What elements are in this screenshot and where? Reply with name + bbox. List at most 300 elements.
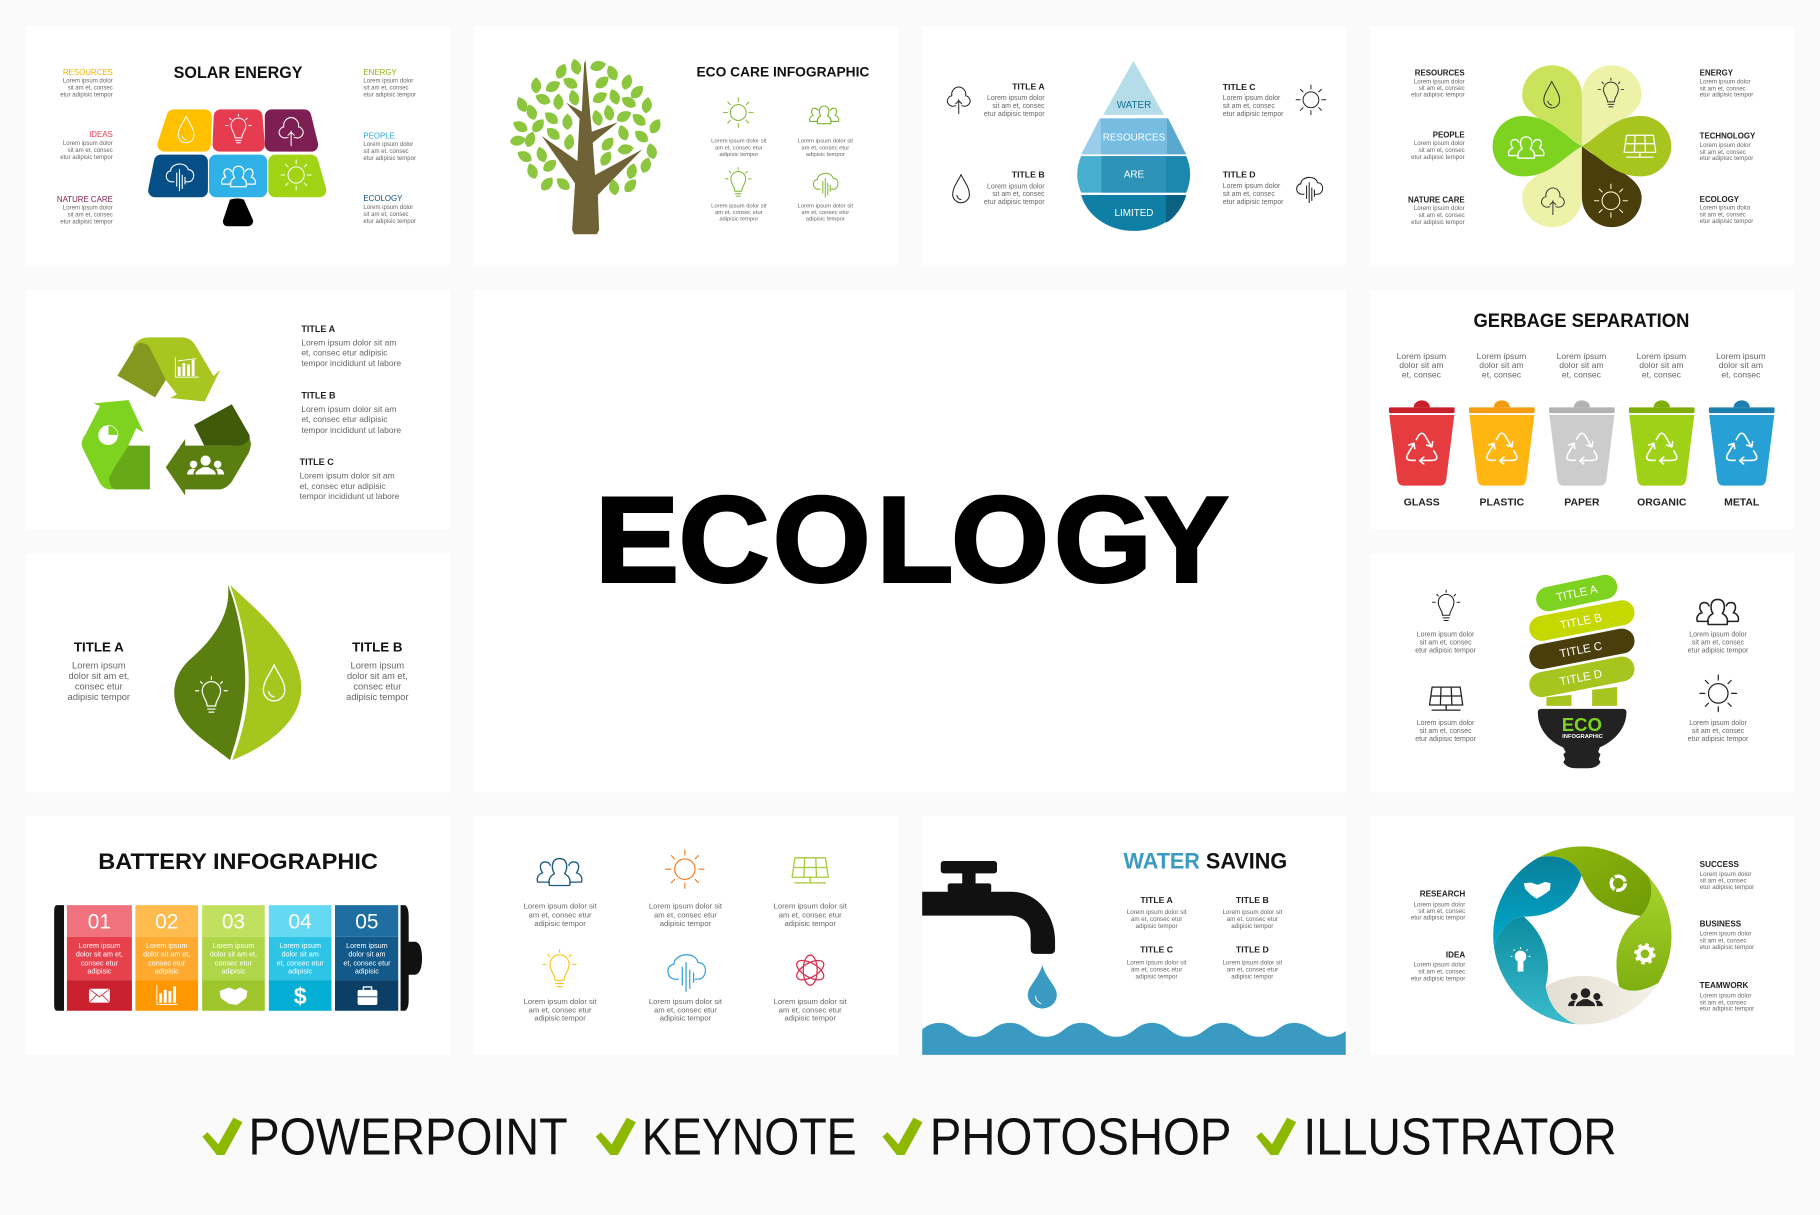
text: icon captions: adipisic tempor bbox=[660, 919, 712, 928]
drop diagram: LIMITED bbox=[1115, 208, 1153, 219]
text: icon captions: am et, consec etur bbox=[529, 910, 592, 919]
text: title b bbox=[984, 170, 1045, 206]
icon: bulb bbox=[543, 950, 576, 987]
text: title a: et, consec etur adipisic bbox=[301, 348, 388, 358]
text: ideas bbox=[60, 130, 113, 161]
text: research: sit am et, consec bbox=[1418, 908, 1465, 915]
faucet bbox=[922, 861, 1055, 954]
battery cell 02: consec etur bbox=[148, 958, 186, 967]
text: research bbox=[1411, 889, 1465, 922]
text: teamwork: TEAMWORK bbox=[1700, 981, 1748, 990]
text: icon captions: adipisic tempor bbox=[785, 1014, 836, 1023]
text: title c: TITLE C bbox=[1140, 945, 1174, 955]
text: resources bbox=[1411, 68, 1465, 98]
text: ecology bbox=[363, 194, 416, 225]
battery cell 05: 05 bbox=[355, 910, 379, 933]
text: success: Lorem ipsum dolor bbox=[1700, 871, 1751, 878]
battery cell 03 bbox=[202, 905, 265, 1011]
icons: eco care bbox=[723, 98, 839, 197]
format list bbox=[202, 1107, 1617, 1165]
text: icon captions: am et, consec etur bbox=[779, 910, 842, 919]
text: bulb captions: etur adipisic tempor bbox=[1415, 648, 1477, 655]
text: title b bbox=[301, 390, 401, 435]
text: energy bbox=[363, 68, 416, 98]
text: business: Lorem ipsum dolor bbox=[1700, 931, 1751, 938]
text: title a: TITLE A bbox=[1012, 81, 1045, 91]
text: idea: IDEA bbox=[1446, 950, 1465, 959]
panel: recycling bbox=[26, 290, 450, 529]
text: bulb captions: Lorem ipsum dolor bbox=[1417, 720, 1475, 727]
text: eco care captions: Lorem ipsum dolor sit bbox=[798, 204, 853, 210]
battery cell 04: Lorem ipsum bbox=[279, 941, 321, 950]
text: title a bbox=[301, 324, 401, 368]
battery cell 05 bbox=[335, 905, 398, 1011]
text: eco care captions: am et, consec etur bbox=[801, 210, 849, 216]
text: title a: etur adipisic tempor bbox=[984, 111, 1045, 118]
text: icon captions bbox=[524, 902, 848, 1023]
text: title b: TITLE B bbox=[301, 390, 336, 400]
bin: plastic bbox=[1469, 400, 1535, 508]
battery caps bbox=[54, 905, 422, 1011]
text: title d bbox=[1222, 945, 1282, 980]
text: title b: Lorem ipsum bbox=[351, 660, 404, 670]
text: research: etur adipisic tempor bbox=[1411, 915, 1465, 922]
icon: sun bbox=[666, 850, 704, 888]
text: bin captions: et, consec bbox=[1402, 370, 1442, 380]
text: ecology: sit am et, consec bbox=[1700, 211, 1746, 218]
battery cell 03: Lorem ipsum bbox=[213, 941, 254, 950]
bulb diagram bbox=[1527, 573, 1637, 768]
text: bin captions: et, consec bbox=[1721, 370, 1761, 380]
text: energy: etur adipisic tempor bbox=[1700, 91, 1753, 98]
text: bulb captions: sit am et, consec bbox=[1419, 640, 1472, 647]
text: bin captions: et, consec bbox=[1562, 370, 1602, 380]
format: photoshop: PHOTOSHOP bbox=[930, 1107, 1231, 1165]
text: title a: Lorem ipsum bbox=[72, 660, 126, 670]
drop diagram: RESOURCES bbox=[1103, 132, 1166, 143]
text: bin captions: et, consec bbox=[1482, 370, 1522, 380]
text: bin captions: dolor sit am bbox=[1719, 360, 1763, 370]
check: photoshop bbox=[882, 1118, 923, 1155]
text: icon captions: am et, consec etur bbox=[529, 1005, 592, 1014]
text: idea: Lorem ipsum dolor bbox=[1414, 962, 1465, 969]
battery cell 01: dolor sit am et, bbox=[76, 950, 123, 959]
heading: solar energy: SOLAR ENERGY bbox=[174, 63, 302, 82]
text: bin captions: Lorem ipsum bbox=[1716, 351, 1766, 361]
text: ecology: sit am et, consec bbox=[363, 212, 409, 218]
text: energy: ENERGY bbox=[1700, 68, 1734, 77]
text: success bbox=[1700, 860, 1754, 891]
battery cell 04: adipisic bbox=[288, 967, 313, 976]
bulb diagram: TITLE C bbox=[1559, 640, 1603, 661]
text: eco care captions: adipisic tempor bbox=[806, 216, 845, 222]
text: title b: TITLE B bbox=[1012, 170, 1045, 180]
text: title d: etur adipisic tempor bbox=[1223, 199, 1284, 206]
text: business: etur adipisic tempor bbox=[1700, 944, 1754, 951]
text: icon captions: Lorem ipsum dolor sit bbox=[774, 997, 848, 1006]
battery cell 05: et, consec etur bbox=[343, 958, 391, 967]
bin: organic bbox=[1629, 400, 1695, 508]
text: nature care: sit am et, consec bbox=[1419, 212, 1465, 219]
text: technology: Lorem ipsum dolor bbox=[1700, 142, 1751, 149]
bin: metal: METAL bbox=[1724, 497, 1760, 508]
text: bin captions bbox=[1397, 351, 1766, 380]
text: title b: etur adipisic tempor bbox=[984, 199, 1045, 206]
text: title c: am et, consec etur bbox=[1131, 966, 1182, 973]
text: teamwork: sit am et, consec bbox=[1700, 999, 1747, 1006]
text: eco care captions bbox=[711, 139, 853, 222]
icon: atom bbox=[794, 955, 827, 985]
text: title b: Lorem ipsum dolor bbox=[987, 184, 1045, 191]
text: nature care: NATURE CARE bbox=[57, 195, 113, 204]
text: ideas: IDEAS bbox=[89, 130, 113, 139]
text: energy: sit am et, consec bbox=[363, 85, 409, 91]
text: bin captions: Lorem ipsum bbox=[1637, 351, 1686, 361]
text: nature care bbox=[1408, 196, 1465, 226]
panel: clover bbox=[1370, 27, 1794, 266]
icon: people bbox=[537, 859, 582, 885]
text: title a: Lorem ipsum dolor bbox=[987, 95, 1045, 102]
text: title b: sit am et, consec bbox=[992, 191, 1045, 198]
text: title d: TITLE D bbox=[1223, 170, 1256, 180]
text: energy: Lorem ipsum dolor bbox=[1700, 79, 1751, 86]
text: ecology: etur adipisic tempor bbox=[363, 219, 416, 225]
bin: paper bbox=[1549, 400, 1615, 508]
text: title a: Lorem ipsum dolor sit bbox=[1127, 909, 1187, 916]
text: resources: Lorem ipsum dolor bbox=[1414, 79, 1465, 86]
text: title c: Lorem ipsum dolor sit am bbox=[300, 471, 395, 481]
text: eco care captions: am et, consec etur bbox=[715, 210, 763, 216]
text: ideas: Lorem ipsum dolor bbox=[63, 141, 113, 147]
battery cell 04: $ bbox=[294, 983, 307, 1009]
text: bin captions: dolor sit am bbox=[1399, 360, 1444, 370]
text: energy: Lorem ipsum dolor bbox=[363, 78, 413, 84]
battery cell 04: 04 bbox=[289, 910, 312, 933]
text: title c: TITLE C bbox=[1223, 82, 1256, 92]
heading: water saving: WATER SAVING bbox=[1124, 849, 1287, 874]
text: technology: sit am et, consec bbox=[1700, 149, 1746, 156]
text: title b: TITLE B bbox=[352, 640, 403, 655]
recycling arrows bbox=[82, 337, 251, 496]
battery cell 02: dolor sit am et, bbox=[143, 950, 190, 959]
icon: cloud bbox=[668, 955, 705, 991]
text: icon captions: adipisic tempor bbox=[534, 1014, 586, 1023]
text: title a bbox=[984, 81, 1045, 118]
text: energy: etur adipisic tempor bbox=[363, 92, 416, 98]
text: people: PEOPLE bbox=[363, 132, 395, 141]
text: people: Lorem ipsum dolor bbox=[1414, 140, 1465, 147]
battery cell 03: consec etur bbox=[215, 958, 253, 967]
text: nature care: NATURE CARE bbox=[1408, 196, 1465, 205]
text: technology: TECHNOLOGY bbox=[1700, 132, 1756, 141]
text: nature care: sit am et, consec bbox=[68, 212, 113, 218]
text: resources bbox=[60, 68, 113, 98]
text: people: etur adipisic tempor bbox=[1411, 154, 1465, 161]
tree bbox=[509, 58, 664, 234]
text: icon captions: Lorem ipsum dolor sit bbox=[774, 902, 848, 911]
icons: water drop panel bbox=[947, 85, 1326, 203]
text: people bbox=[363, 132, 416, 162]
text: people: sit am et, consec bbox=[363, 149, 409, 155]
text: title a: TITLE A bbox=[301, 324, 336, 334]
circle diagram bbox=[1493, 846, 1672, 1024]
text: bulb captions: etur adipisic tempor bbox=[1688, 648, 1749, 655]
text: people: Lorem ipsum dolor bbox=[363, 142, 413, 148]
text: people: PEOPLE bbox=[1433, 131, 1465, 140]
bulb diagram: TITLE A bbox=[1555, 583, 1599, 604]
text: energy: ENERGY bbox=[363, 68, 397, 77]
battery cell 04: et, consec etur bbox=[277, 958, 324, 967]
text: idea: etur adipisic tempor bbox=[1411, 976, 1465, 983]
text: bin captions: et, consec bbox=[1642, 370, 1682, 380]
text: title a: tempor incididunt ut labore bbox=[301, 358, 401, 368]
text: title a bbox=[68, 640, 130, 702]
text: ecology: ECOLOGY bbox=[1700, 195, 1740, 204]
text: nature care bbox=[57, 195, 113, 225]
text: title a: consec etur bbox=[75, 681, 123, 691]
format: powerpoint: POWERPOINT bbox=[249, 1107, 568, 1165]
text: bulb captions: sit am et, consec bbox=[1419, 728, 1472, 735]
text: title b bbox=[1222, 895, 1282, 930]
text: bulb captions: etur adipisic tempor bbox=[1415, 736, 1477, 743]
text: title a: TITLE A bbox=[1140, 895, 1174, 905]
text: title d: TITLE D bbox=[1236, 945, 1269, 955]
text: title a: adipisic tempor bbox=[1136, 923, 1178, 930]
text: title b: adipisic tempor bbox=[1231, 923, 1273, 930]
heading: battery infographic: BATTERY INFOGRAPHIC bbox=[98, 849, 378, 874]
leaf diagram bbox=[174, 585, 301, 760]
text: title b bbox=[346, 640, 409, 702]
text: success: SUCCESS bbox=[1700, 860, 1739, 869]
drop diagram bbox=[1077, 61, 1190, 231]
battery cell 02: Lorem ipsum bbox=[146, 941, 188, 950]
text: idea bbox=[1411, 950, 1465, 983]
panel: battery infographic bbox=[26, 816, 450, 1055]
text: title a: am et, consec etur bbox=[1131, 916, 1182, 923]
text: icon captions: am et, consec etur bbox=[779, 1005, 842, 1014]
battery cell 04 bbox=[269, 905, 332, 1011]
text: ecology: Lorem ipsum dolor bbox=[363, 205, 413, 211]
text: title c: Lorem ipsum dolor sit bbox=[1127, 959, 1187, 966]
text: eco care captions: Lorem ipsum dolor sit bbox=[798, 139, 853, 145]
text: ecology: ECOLOGY bbox=[363, 194, 403, 203]
text: bulb captions bbox=[1415, 632, 1749, 743]
text: teamwork: Lorem ipsum dolor bbox=[1700, 992, 1751, 999]
drop diagram: WATER bbox=[1117, 100, 1151, 111]
drop diagram: ARE bbox=[1124, 170, 1145, 181]
text: title d: Lorem ipsum dolor bbox=[1223, 183, 1281, 190]
text: title a: TITLE A bbox=[74, 640, 124, 655]
text: title c bbox=[1223, 82, 1284, 118]
text: title c bbox=[1127, 945, 1187, 980]
text: icon captions: Lorem ipsum dolor sit bbox=[649, 902, 723, 911]
text: technology bbox=[1700, 132, 1756, 162]
text: eco care captions: Lorem ipsum dolor sit bbox=[711, 204, 767, 210]
text: nature care: Lorem ipsum dolor bbox=[63, 205, 113, 211]
battery cell 02 bbox=[135, 905, 198, 1011]
text: resources: RESOURCES bbox=[1415, 68, 1465, 77]
battery cell 03: dolor sit am et, bbox=[210, 950, 257, 959]
battery cell 05: dolor sit am bbox=[348, 950, 385, 959]
clover diagram bbox=[1493, 65, 1671, 227]
text: resources: RESOURCES bbox=[63, 68, 113, 77]
text: icon captions: adipisic tempor bbox=[660, 1014, 712, 1023]
text: bulb captions: sit am et, consec bbox=[1692, 728, 1745, 735]
text: title c: sit am et, consec bbox=[1223, 103, 1275, 110]
text: icon captions: Lorem ipsum dolor sit bbox=[524, 902, 598, 911]
text: eco care captions: adipisic tempor bbox=[719, 216, 758, 222]
text: bin captions: dolor sit am bbox=[1559, 360, 1604, 370]
text: ecology bbox=[1700, 195, 1753, 225]
text: ideas: sit am et, consec bbox=[68, 148, 113, 154]
solar panel diagram bbox=[155, 114, 319, 226]
panel: water saving bbox=[922, 816, 1346, 1055]
text: resources: sit am et, consec bbox=[1419, 85, 1465, 92]
bulb diagram: ECO bbox=[1562, 714, 1602, 735]
text: bin captions: Lorem ipsum bbox=[1397, 351, 1446, 361]
text: research: RESEARCH bbox=[1420, 889, 1465, 898]
battery cell 01: Lorem ipsum bbox=[79, 941, 120, 950]
bin: glass: GLASS bbox=[1404, 497, 1440, 508]
text: title c: TITLE C bbox=[300, 457, 334, 467]
battery cell 01: 01 bbox=[88, 910, 111, 933]
battery cell 03: 03 bbox=[222, 910, 245, 933]
text: bin captions: Lorem ipsum bbox=[1557, 351, 1606, 361]
bulb diagram: TITLE D bbox=[1558, 667, 1603, 688]
text: eco care captions: am et, consec etur bbox=[801, 146, 849, 152]
text: title b: Lorem ipsum dolor sit bbox=[1222, 909, 1282, 916]
text: nature care: etur adipisic tempor bbox=[1411, 219, 1465, 226]
text: bulb captions: etur adipisic tempor bbox=[1688, 736, 1749, 743]
text: bulb captions: sit am et, consec bbox=[1692, 640, 1745, 647]
check: illustrator bbox=[1256, 1118, 1296, 1155]
battery cell 01: consec etur bbox=[81, 958, 119, 967]
battery cell 01 bbox=[67, 905, 132, 1011]
text: title a: dolor sit am et, bbox=[68, 671, 129, 681]
text: title a: Lorem ipsum dolor sit am bbox=[301, 338, 396, 348]
icons: bulb panel bbox=[1430, 590, 1738, 712]
text: eco care captions: am et, consec etur bbox=[715, 146, 763, 152]
panel: leaf bbox=[26, 554, 450, 793]
text: resources: etur adipisic tempor bbox=[1411, 91, 1465, 98]
water drop bbox=[1028, 965, 1057, 1008]
text: research: Lorem ipsum dolor bbox=[1414, 901, 1465, 908]
text: title d: am et, consec etur bbox=[1227, 966, 1278, 973]
text: icon captions: am et, consec etur bbox=[654, 910, 717, 919]
heading: eco care infographic: ECO CARE INFOGRAPHIC bbox=[696, 64, 869, 80]
text: idea: sit am et, consec bbox=[1418, 969, 1465, 976]
text: title b: et, consec etur adipisic bbox=[301, 414, 388, 424]
text: title d: sit am et, consec bbox=[1223, 191, 1275, 198]
text: bulb captions: Lorem ipsum dolor bbox=[1689, 720, 1747, 727]
text: ideas: etur adipisic tempor bbox=[60, 155, 113, 161]
text: title b: consec etur bbox=[353, 681, 401, 691]
text: ecology: Lorem ipsum dolor bbox=[1700, 204, 1751, 211]
text: title c: adipisic tempor bbox=[1136, 973, 1178, 980]
text: title b: tempor incididunt ut labore bbox=[301, 425, 401, 435]
text: bin captions: dolor sit am bbox=[1639, 360, 1684, 370]
text: success: sit am et, consec bbox=[1700, 878, 1747, 885]
text: icon captions: am et, consec etur bbox=[654, 1005, 717, 1014]
text: people: sit am et, consec bbox=[1419, 147, 1465, 154]
check: keynote bbox=[596, 1118, 636, 1155]
text: nature care: Lorem ipsum dolor bbox=[1414, 205, 1465, 212]
battery cell 04: dolor sit am bbox=[282, 950, 319, 959]
battery cell 05: Lorem ipsum bbox=[346, 941, 388, 950]
text: business bbox=[1700, 920, 1754, 951]
battery cell 01: adipisic bbox=[87, 967, 112, 976]
panel: eco care infographic bbox=[474, 27, 898, 266]
text: icon captions: adipisic tempor bbox=[534, 919, 586, 928]
bin: plastic: PLASTIC bbox=[1480, 497, 1525, 508]
format: keynote: KEYNOTE bbox=[642, 1107, 857, 1165]
text: bulb captions: Lorem ipsum dolor bbox=[1689, 632, 1747, 639]
text: teamwork: etur adipisic tempor bbox=[1700, 1006, 1754, 1013]
text: eco care captions: Lorem ipsum dolor sit bbox=[711, 139, 767, 145]
battery cell 03: adipisic bbox=[221, 967, 246, 976]
battery cell 05: adipisic bbox=[355, 967, 379, 976]
text: resources: sit am et, consec bbox=[68, 85, 113, 91]
text: title a: sit am et, consec bbox=[992, 103, 1045, 110]
text: eco care captions: adipisic tempor bbox=[806, 152, 845, 158]
bin: organic: ORGANIC bbox=[1637, 497, 1687, 508]
text: technology: etur adipisic tempor bbox=[1700, 155, 1753, 162]
text: teamwork bbox=[1700, 981, 1754, 1013]
text: ecology: etur adipisic tempor bbox=[1700, 218, 1753, 225]
battery cell 02: 02 bbox=[155, 910, 178, 933]
panel: garbage separation bbox=[1370, 290, 1794, 529]
text: title a bbox=[1127, 895, 1187, 930]
bulb diagram: TITLE B bbox=[1559, 611, 1603, 632]
text: business: BUSINESS bbox=[1700, 920, 1742, 929]
text: eco care captions: adipisic tempor bbox=[719, 152, 758, 158]
heading: gerbage separation: GERBAGE SEPARATION bbox=[1474, 310, 1689, 332]
text: title b: TITLE B bbox=[1236, 895, 1269, 905]
text: bin captions: dolor sit am bbox=[1479, 360, 1524, 370]
text: business: sit am et, consec bbox=[1700, 937, 1747, 944]
text: title b: Lorem ipsum dolor sit am bbox=[301, 404, 396, 414]
text: people: etur adipisic tempor bbox=[363, 156, 416, 162]
panel: eco bulb bbox=[1370, 554, 1794, 793]
text: nature care: etur adipisic tempor bbox=[60, 219, 113, 225]
text: energy bbox=[1700, 68, 1753, 98]
text: icon captions: Lorem ipsum dolor sit bbox=[649, 997, 723, 1006]
text: icon captions: adipisic tempor bbox=[785, 919, 836, 928]
waves bbox=[922, 1023, 1346, 1055]
title panel: ecology bbox=[474, 290, 1346, 793]
panel: five-part circle bbox=[1370, 816, 1794, 1055]
text: title c: Lorem ipsum dolor bbox=[1223, 95, 1281, 102]
battery cell 02: adipisic bbox=[155, 967, 179, 976]
text: icon captions: Lorem ipsum dolor sit bbox=[524, 997, 598, 1006]
panel: icon grid bbox=[474, 816, 898, 1055]
text: title b: am et, consec etur bbox=[1227, 916, 1278, 923]
text: bin captions: Lorem ipsum bbox=[1477, 351, 1526, 361]
text: title c: et, consec etur adipisic bbox=[300, 481, 387, 491]
icon: solar panel bbox=[792, 858, 828, 883]
text: title c bbox=[300, 457, 400, 501]
bin: paper: PAPER bbox=[1564, 497, 1600, 508]
check: powerpoint bbox=[202, 1118, 243, 1155]
text: success: etur adipisic tempor bbox=[1700, 884, 1754, 891]
text: title d bbox=[1223, 170, 1284, 206]
bulb diagram: INFOGRAPHIC bbox=[1562, 734, 1604, 740]
text: title d: Lorem ipsum dolor sit bbox=[1222, 959, 1282, 966]
text: title b: dolor sit am et, bbox=[347, 671, 408, 681]
panel: water drop bbox=[922, 27, 1346, 266]
bin: glass bbox=[1389, 400, 1455, 508]
text: title c: etur adipisic tempor bbox=[1223, 111, 1284, 118]
